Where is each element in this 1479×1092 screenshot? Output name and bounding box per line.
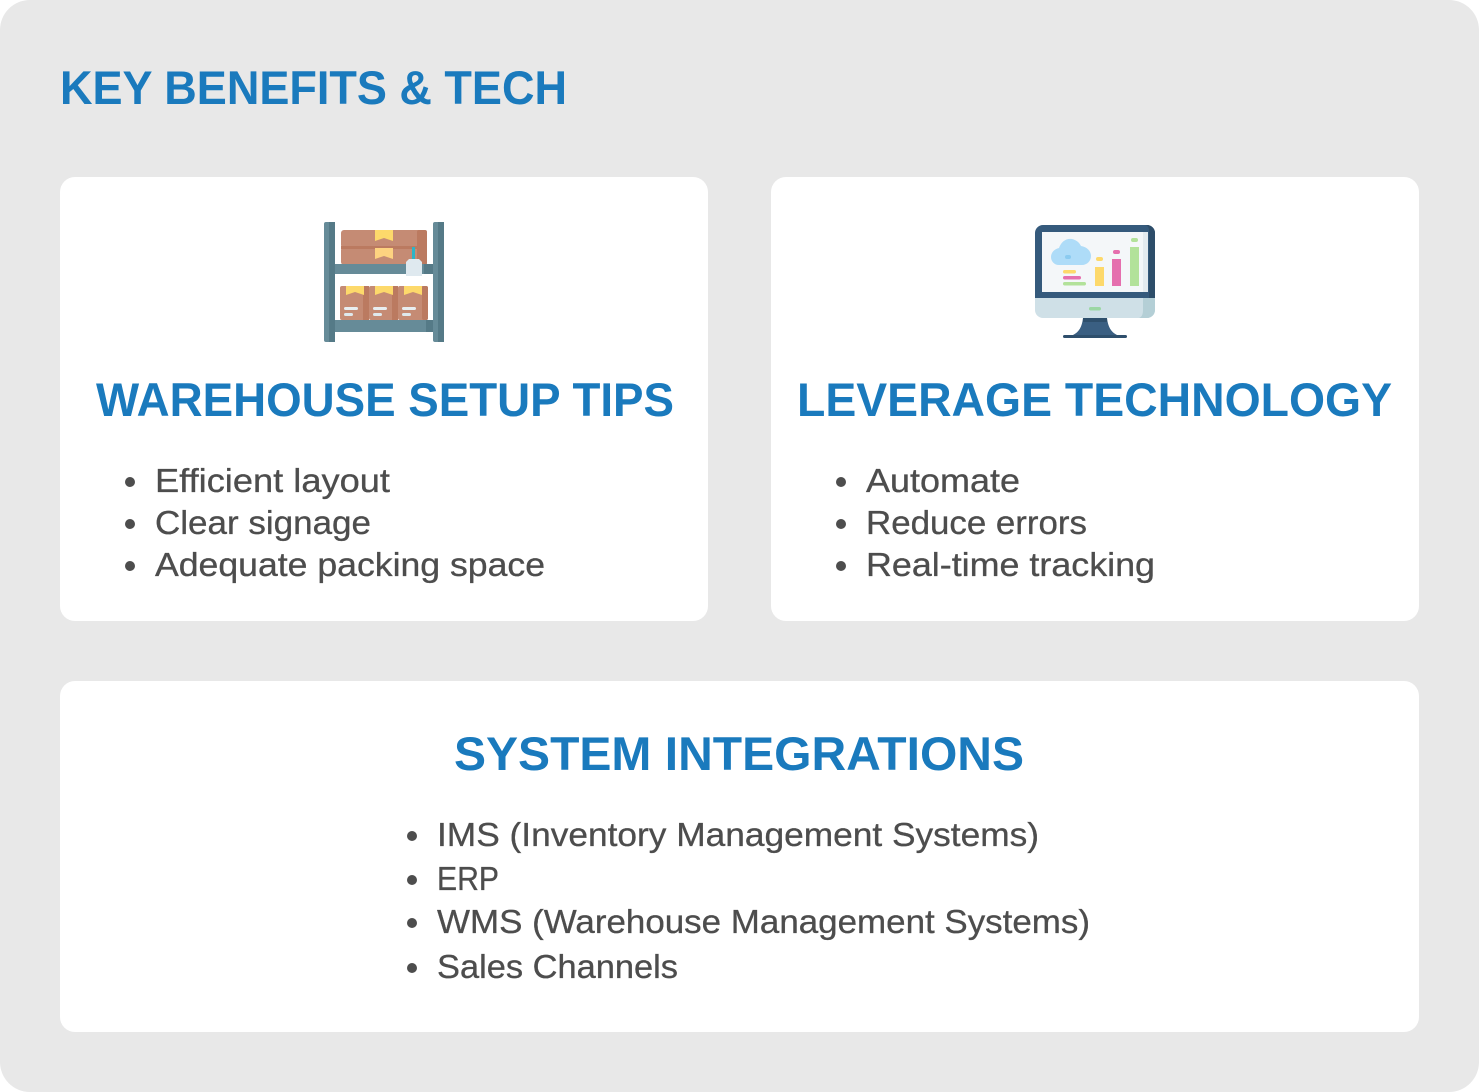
list: technology benefits: Real-time tracking [866, 546, 1155, 583]
list: warehouse tips: Adequate packing space [155, 546, 545, 583]
list: integrations: ERP [437, 860, 499, 897]
icon: warehouse shelf with boxes [324, 222, 444, 342]
title: KEY BENEFITS & TECH [60, 61, 567, 114]
list: integrations [407, 816, 1090, 985]
list: warehouse tips [125, 462, 545, 583]
list: technology benefits: Reduce errors [866, 504, 1087, 541]
heading: leverage technology: LEVERAGE TECHNOLOGY [797, 373, 1392, 426]
list: integrations: WMS (Warehouse Management Systems) [437, 903, 1090, 940]
heading: system integrations: SYSTEM INTEGRATIONS [454, 727, 1024, 780]
panel: warehouse setup tips [60, 177, 708, 621]
list: warehouse tips: Efficient layout [155, 462, 390, 499]
list: integrations: IMS (Inventory Management Systems) [437, 816, 1039, 853]
panel: leverage technology [771, 177, 1419, 621]
list: technology benefits: Automate [866, 462, 1020, 499]
icon: computer monitor dashboard [1035, 225, 1155, 338]
list: technology benefits [836, 462, 1155, 583]
panel: system integrations [60, 681, 1419, 1032]
heading: warehouse setup tips: WAREHOUSE SETUP TIPS [96, 373, 674, 426]
list: integrations: Sales Channels [437, 948, 678, 985]
list: warehouse tips: Clear signage [155, 504, 371, 541]
